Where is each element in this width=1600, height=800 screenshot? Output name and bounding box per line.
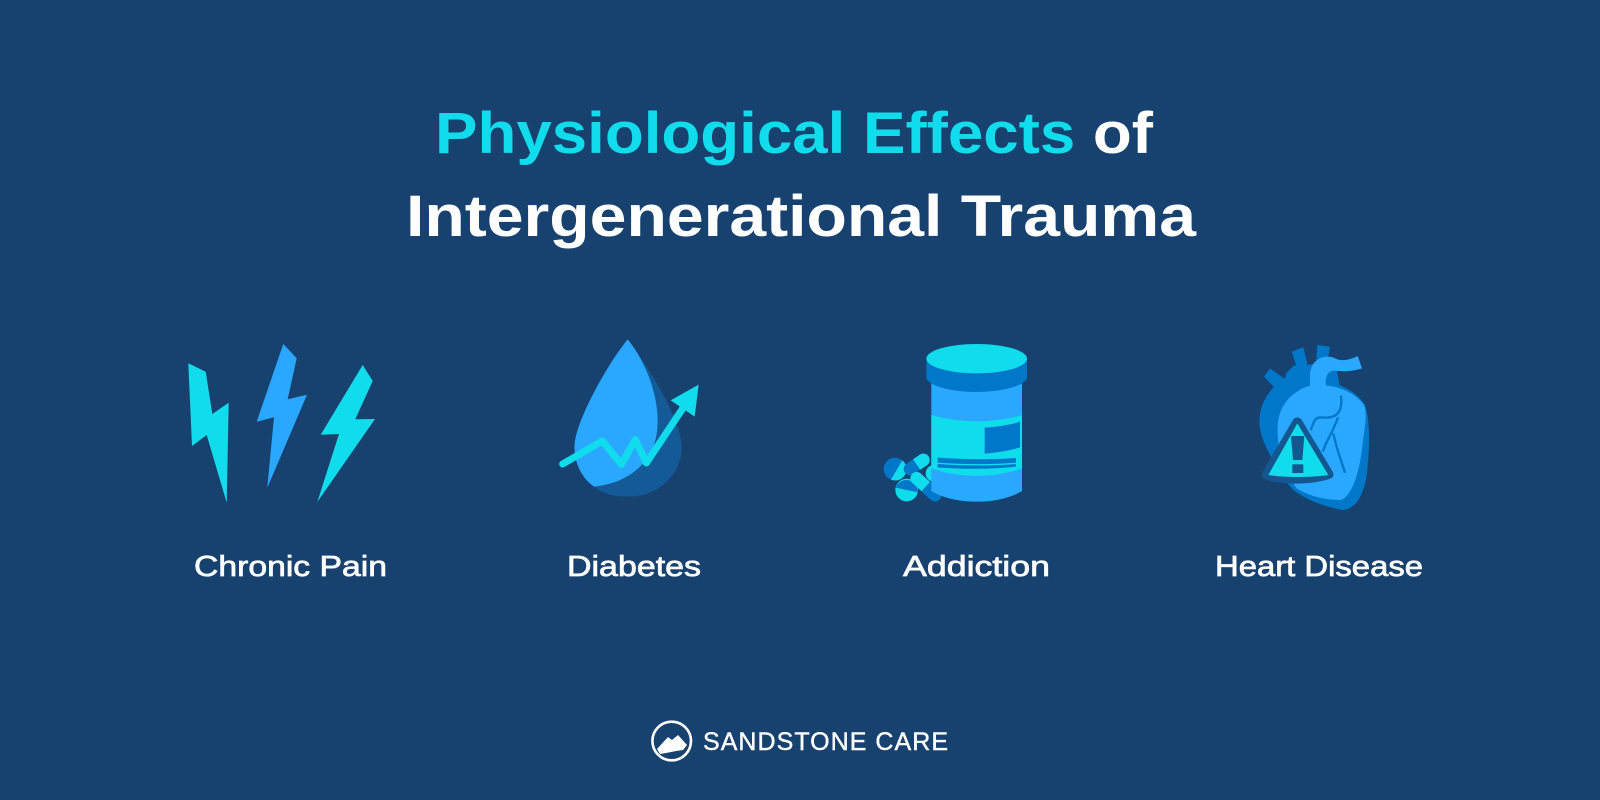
- capsule top: [910, 460, 923, 469]
- icon: pill bottle with pills: [884, 344, 1027, 502]
- logo: sandstone care: [652, 722, 948, 760]
- title line 2: Intergenerational Trauma: [406, 184, 1197, 249]
- title line 1: Physiological Effects of: [435, 101, 1154, 166]
- logo wordmark: SANDSTONE CARE: [703, 728, 948, 756]
- logo mountain: [657, 735, 687, 754]
- middle bolt: [257, 344, 307, 488]
- icon: water drop with rising arrow: [563, 339, 699, 497]
- round pill bottom: [895, 479, 918, 501]
- aorta: [1310, 356, 1362, 388]
- icon: lightning bolts: [188, 344, 375, 503]
- warning triangle fill: [1268, 423, 1328, 477]
- drop shadow side: [593, 339, 682, 497]
- left vessel: [1264, 368, 1288, 393]
- left bolt: [188, 363, 229, 503]
- label: diabetes: Diabetes: [567, 551, 701, 583]
- label stripes: [938, 458, 1016, 469]
- right bolt: [317, 365, 375, 502]
- pills: [884, 454, 942, 501]
- label: chronic pain: Chronic Pain: [194, 551, 387, 583]
- vessels back: [1285, 345, 1340, 390]
- exclamation bar: [1291, 436, 1304, 460]
- arrow head: [671, 385, 699, 417]
- bottle cap rim: [926, 358, 1027, 392]
- heart back: [1259, 377, 1369, 510]
- logo ring: [652, 722, 691, 760]
- capsule bottom: [917, 478, 935, 495]
- icon: heart with warning sign: [1259, 345, 1369, 510]
- label: heart disease: Heart Disease: [1215, 551, 1423, 583]
- trend line: [563, 405, 685, 464]
- label square: [985, 422, 1020, 454]
- title: [406, 101, 1197, 249]
- heart front: [1278, 385, 1366, 500]
- round pill behind bottle: [926, 465, 942, 482]
- coronary veins: [1311, 396, 1345, 473]
- bottle label: [931, 415, 1022, 476]
- warning triangle outline: [1262, 417, 1333, 484]
- round pill left: [884, 458, 906, 480]
- drop front: [574, 339, 658, 487]
- bottle cap top: [926, 344, 1027, 373]
- exclamation dot: [1292, 464, 1303, 473]
- label: addiction: Addiction: [903, 551, 1050, 583]
- bottle body: [931, 380, 1022, 502]
